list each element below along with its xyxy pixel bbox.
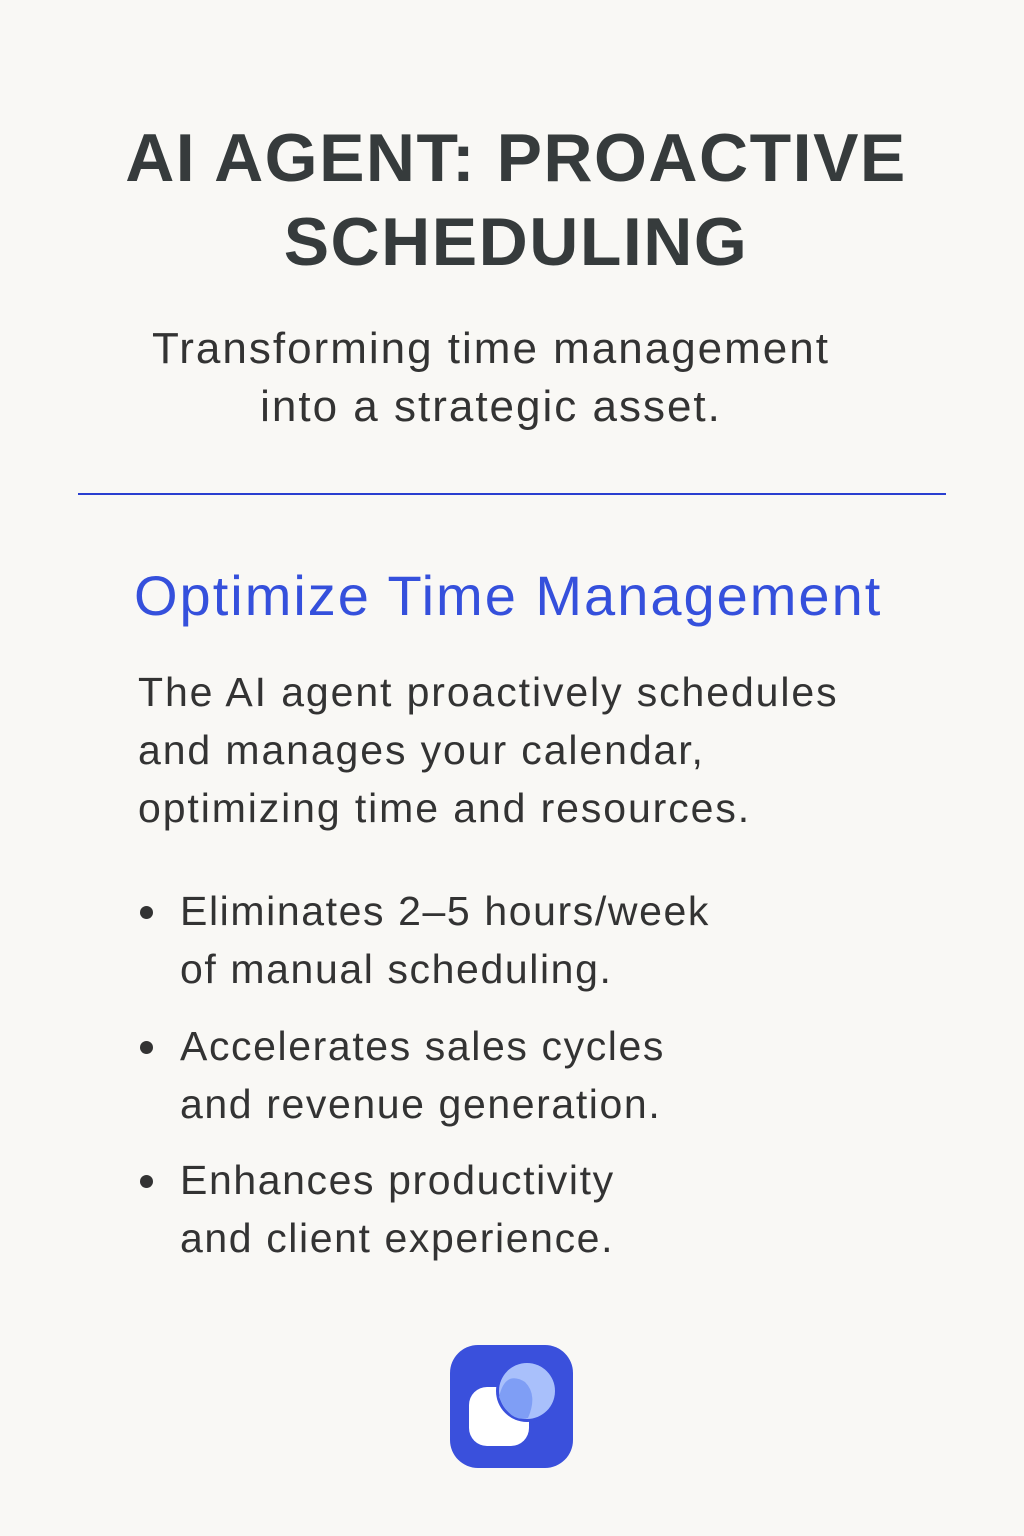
subtitle — [152, 324, 830, 431]
section heading: Optimize Time Management — [134, 564, 882, 627]
bullet 3: and client experience. — [180, 1215, 614, 1261]
bullet list — [140, 888, 710, 1261]
title: SCHEDULING — [284, 204, 748, 280]
body text: optimizing time and resources. — [138, 785, 751, 831]
bullet 3: Enhances productivity — [180, 1157, 615, 1203]
bullet 3 — [140, 1157, 615, 1261]
bullet 1 — [140, 888, 710, 992]
subtitle: Transforming time management — [152, 324, 830, 373]
body text: and manages your calendar, — [138, 727, 705, 773]
bullet 2: and revenue generation. — [180, 1081, 661, 1127]
bullet 2 — [140, 1023, 665, 1127]
title — [125, 120, 907, 280]
icon: app logo — [450, 1345, 573, 1468]
body text: The AI agent proactively schedules — [138, 669, 838, 715]
body text — [138, 669, 838, 831]
title: AI AGENT: PROACTIVE — [125, 120, 907, 196]
subtitle: into a strategic asset. — [260, 382, 722, 431]
bullet 1: Eliminates 2–5 hours/week — [180, 888, 710, 934]
divider line — [78, 493, 946, 495]
bullet 2: Accelerates sales cycles — [180, 1023, 665, 1069]
bullet 1: of manual scheduling. — [180, 946, 612, 992]
